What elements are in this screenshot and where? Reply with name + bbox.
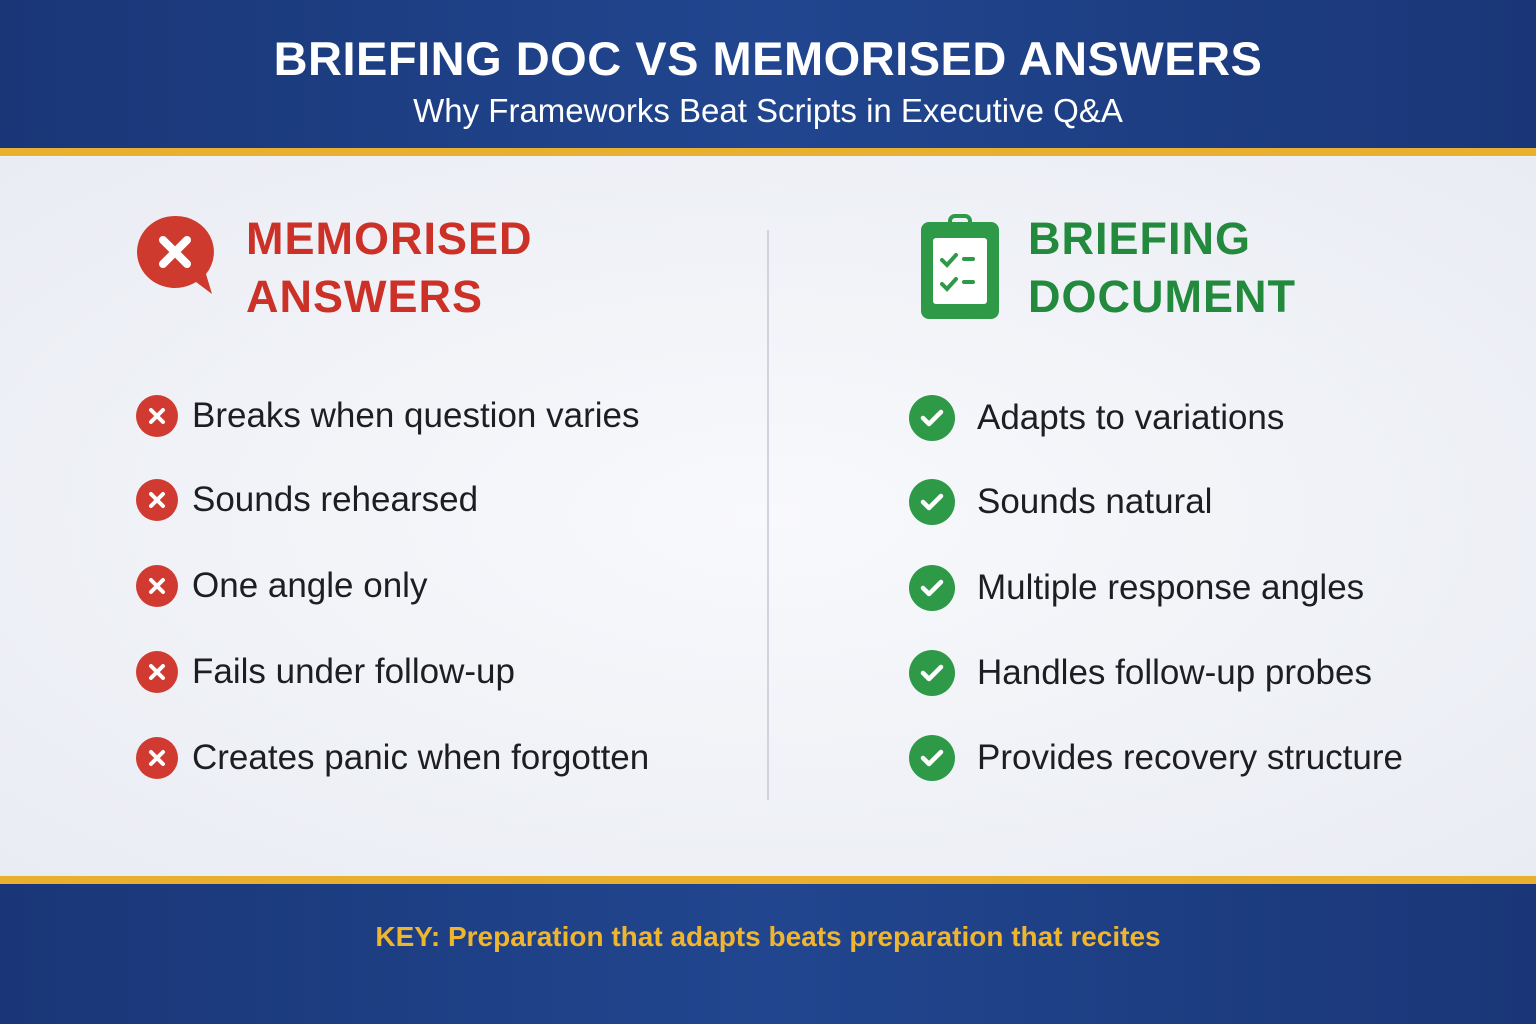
footer key message — [0, 884, 1536, 1024]
heading: briefing document: DOCUMENT — [1028, 271, 1296, 322]
title: BRIEFING DOC VS MEMORISED ANSWERS — [274, 32, 1262, 85]
heading: memorised answers: MEMORISED — [246, 213, 533, 264]
footer key message: KEY: Preparation that adapts beats preparation that recites — [375, 921, 1161, 952]
item 3: Multiple response angles — [977, 568, 1364, 607]
list: briefing benefits — [909, 395, 1403, 781]
item 1: Breaks when question varies — [192, 396, 639, 435]
item 5: Provides recovery structure — [977, 738, 1403, 777]
subtitle: Why Frameworks Beat Scripts in Executive Q&A — [413, 92, 1123, 129]
item 1 — [909, 395, 1284, 441]
header banner — [0, 0, 1536, 149]
item 3: One angle only — [192, 566, 427, 605]
list: memorised drawbacks — [136, 395, 649, 779]
item 2: Sounds rehearsed — [192, 480, 478, 519]
item 1: Adapts to variations — [977, 398, 1284, 437]
heading: memorised answers — [246, 213, 533, 322]
item 5: Creates panic when forgotten — [192, 738, 649, 777]
heading: briefing document — [1028, 213, 1296, 322]
icon: red speech bubble with X — [137, 216, 214, 294]
heading: briefing document: BRIEFING — [1028, 213, 1251, 264]
icon: green clipboard — [921, 214, 999, 319]
item 4: Handles follow-up probes — [977, 653, 1372, 692]
item 2: Sounds natural — [977, 482, 1212, 521]
item 2 — [909, 479, 1212, 525]
heading: memorised answers: ANSWERS — [246, 271, 483, 322]
item 4: Fails under follow-up — [192, 652, 515, 691]
